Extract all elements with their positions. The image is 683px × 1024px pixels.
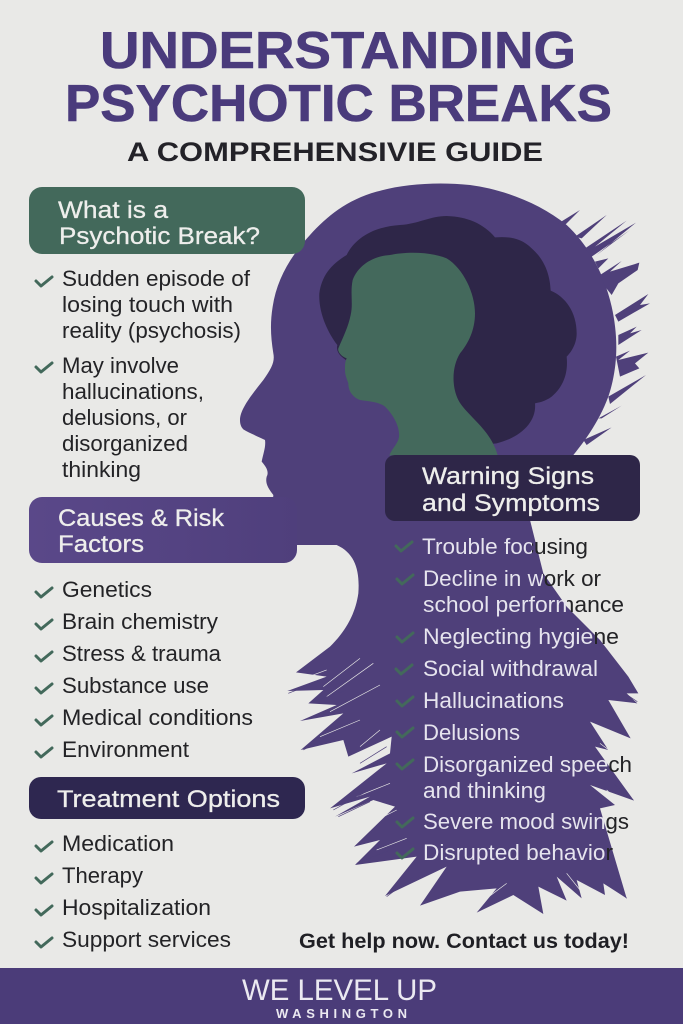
lower body with jagged strokes — [260, 520, 638, 914]
panel: causes and risk factors heading: Causes & Risk — [58, 505, 225, 532]
list: warning signs — [396, 534, 632, 865]
list: what is a psychotic break: delusions, or — [62, 405, 187, 430]
right hair spikes — [558, 210, 650, 445]
panel: warning signs heading — [385, 455, 640, 521]
list: what is a psychotic break — [36, 266, 251, 482]
call to action: Get help now. Contact us today! — [299, 930, 629, 953]
list: warning signs: Disorganized speech — [423, 752, 632, 777]
title — [65, 22, 612, 133]
list: treatment: Therapy — [62, 863, 143, 888]
list: warning signs: Severe mood swings — [423, 809, 629, 834]
subtitle: A COMPREHENSIVIE GUIDE — [127, 137, 543, 167]
panel: causes and risk factors heading — [29, 497, 297, 563]
inner dark hair silhouette — [319, 216, 577, 455]
title: UNDERSTANDING — [100, 22, 576, 80]
list: causes: Medical conditions — [62, 705, 253, 730]
list: what is a psychotic break: thinking — [62, 457, 141, 482]
list: warning signs: Trouble focusing — [422, 534, 588, 559]
list: warning signs: Hallucinations — [423, 688, 564, 713]
list: causes — [36, 577, 253, 762]
panel: what is a psychotic break heading — [29, 187, 305, 254]
list: causes: Genetics — [62, 577, 152, 602]
list: causes: Substance use — [62, 673, 209, 698]
upper head shape — [240, 184, 616, 543]
list: warning signs: Delusions — [423, 720, 520, 745]
list: warning signs: Social withdrawal — [423, 656, 598, 681]
list: treatment — [36, 831, 231, 952]
panel: warning signs heading: Warning Signs — [422, 463, 594, 490]
list: warning signs: school performance — [423, 592, 624, 617]
list: what is a psychotic break: hallucinations, — [62, 379, 204, 404]
list: treatment: Medication — [62, 831, 174, 856]
footer logo text: WASHINGTON — [276, 1006, 407, 1021]
list: warning signs: Disrupted behavior — [423, 840, 613, 865]
check icons — [36, 277, 52, 372]
panel: warning signs heading: and Symptoms — [422, 490, 600, 517]
check icons — [36, 842, 52, 947]
footer logo text: WE LEVEL UP — [242, 974, 437, 1007]
list: treatment: Hospitalization — [62, 895, 211, 920]
list: what is a psychotic break: reality (psychosis) — [62, 318, 241, 343]
footer band — [0, 968, 683, 1024]
list: what is a psychotic break: Sudden episode of — [62, 266, 251, 291]
panel: treatment options heading: Treatment Options — [57, 786, 280, 813]
list: what is a psychotic break: losing touch with — [62, 292, 233, 317]
footer logo text — [242, 974, 437, 1021]
list: causes: Stress & trauma — [62, 641, 222, 666]
check icons — [396, 542, 413, 858]
list: treatment: Support services — [62, 927, 231, 952]
list: warning signs: Neglecting hygiene — [423, 624, 619, 649]
panel: what is a psychotic break heading: Psychotic Break? — [59, 223, 260, 250]
list: warning signs: and thinking — [423, 778, 546, 803]
title: PSYCHOTIC BREAKS — [65, 75, 612, 133]
inner green profile — [338, 253, 498, 455]
panel: what is a psychotic break heading: What is a — [58, 197, 169, 224]
panel: treatment options heading — [29, 777, 305, 819]
check icons — [36, 588, 52, 757]
list: what is a psychotic break: disorganized — [62, 431, 188, 456]
illustration: head silhouette — [240, 184, 650, 914]
feathered edge slits — [300, 658, 633, 903]
list: causes: Brain chemistry — [62, 609, 218, 634]
list: what is a psychotic break: May involve — [62, 353, 179, 378]
list: warning signs: Decline in work or — [423, 566, 601, 591]
list: causes: Environment — [62, 737, 189, 762]
panel: causes and risk factors heading: Factors — [58, 531, 144, 558]
